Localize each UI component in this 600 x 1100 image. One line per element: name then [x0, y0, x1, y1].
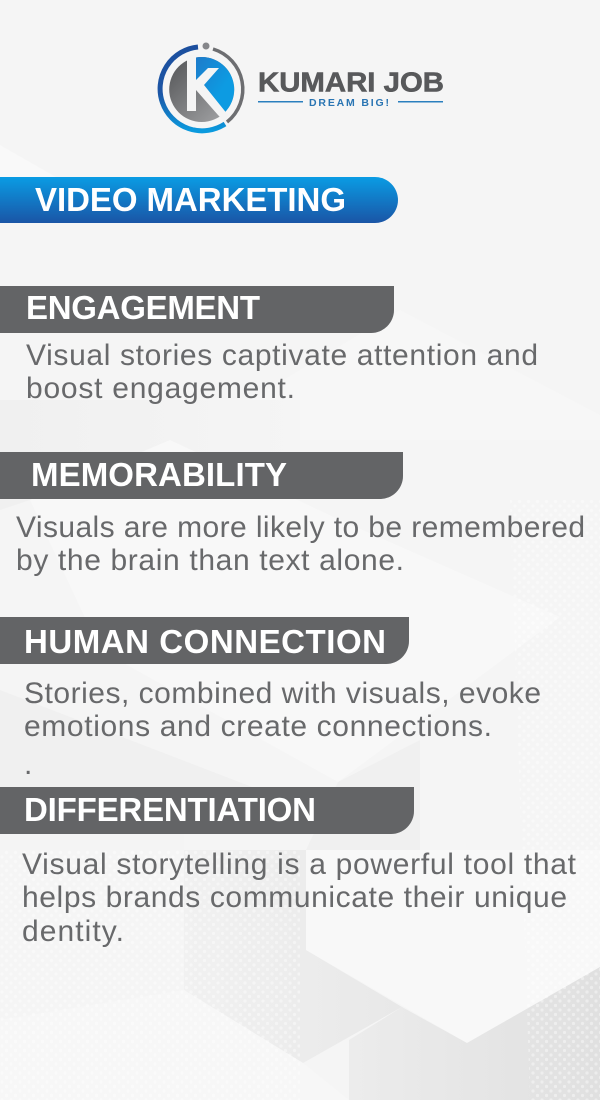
heading: human connection: HUMAN CONNECTION [24, 623, 386, 660]
heading: memorability [0, 452, 403, 499]
panel: differentiation [0, 787, 577, 948]
text: differentiation description: Visual storytelling is a powerful tool that [22, 848, 577, 881]
text: engagement description: Visual stories captivate attention and [26, 339, 538, 372]
text: memorability description: Visuals are more likely to be remembered [16, 511, 585, 544]
text: human connection description [24, 677, 541, 781]
logo wordmark: KUMARI JOB [258, 66, 444, 98]
text: human connection description: . [24, 748, 32, 781]
heading: engagement: ENGAGEMENT [26, 289, 260, 326]
logo [160, 42, 444, 131]
text: differentiation description [22, 848, 577, 948]
panel: memorability [0, 452, 585, 577]
panel: engagement [0, 286, 538, 405]
text: human connection description: emotions and create connections. [24, 710, 492, 743]
logo tagline: DREAM BIG! [309, 97, 389, 109]
text: memorability description: by the brain than text alone. [16, 544, 404, 577]
text: memorability description [16, 511, 585, 577]
text: human connection description: Stories, combined with visuals, evoke [24, 677, 541, 710]
icon: Kumari Job K emblem [160, 42, 243, 131]
heading: memorability: MEMORABILITY [31, 456, 287, 493]
text: differentiation description: dentity. [22, 915, 124, 948]
title banner: VIDEO MARKETING [35, 181, 346, 218]
heading: engagement [0, 286, 394, 333]
text: engagement description: boost engagement. [26, 372, 295, 405]
heading: differentiation [0, 787, 414, 834]
text: engagement description [26, 339, 538, 405]
heading: human connection [0, 617, 409, 664]
text: differentiation description: helps brands communicate their unique [22, 881, 567, 914]
heading: differentiation: DIFFERENTIATION [24, 791, 316, 828]
panel: human connection [0, 617, 541, 781]
title banner [0, 177, 398, 223]
